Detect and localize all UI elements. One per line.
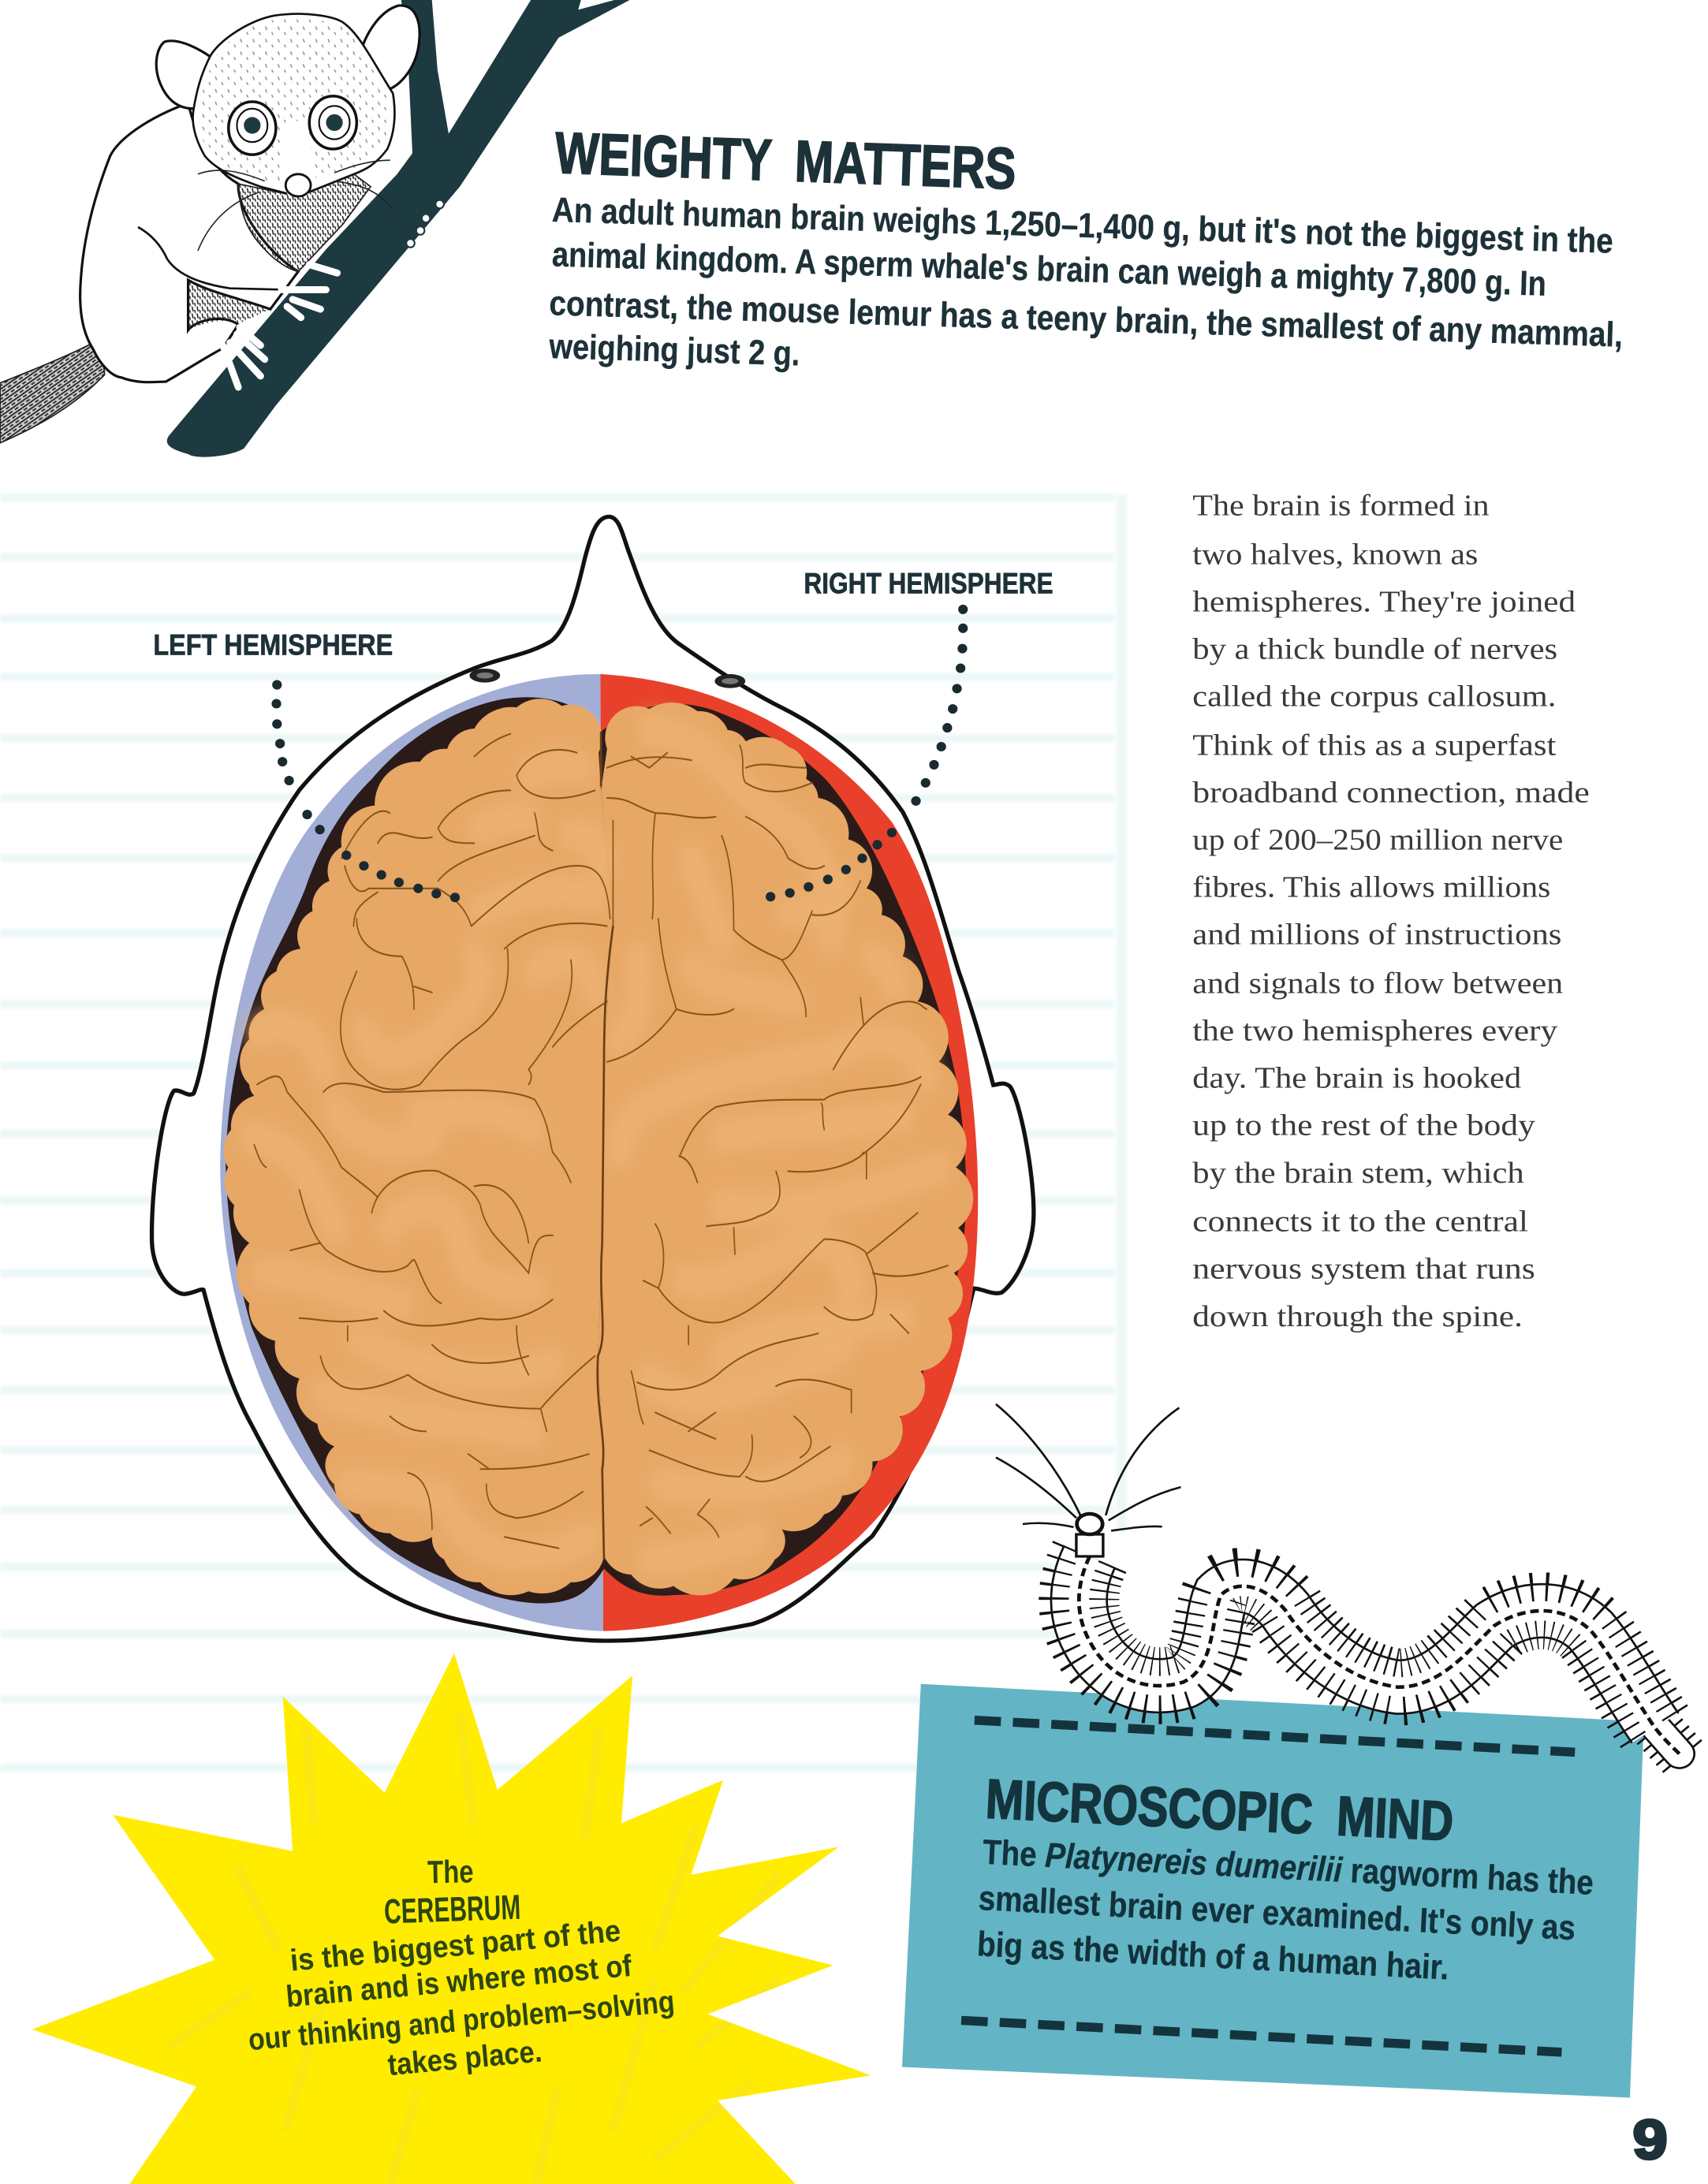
text block: brain description column: day. The brain is hooked — [1192, 1062, 1521, 1095]
snout stripe — [278, 120, 315, 196]
top dashed rule — [975, 1720, 1575, 1752]
illustration: ragworm — [996, 1404, 1684, 1759]
right ear — [360, 6, 420, 92]
illustration: brain — [223, 605, 973, 1604]
body outline — [1079, 1556, 1655, 1728]
text block: weighty matters body: animal kingdom. A sperm whale's brain can weigh a mighty 7,800 g. In — [551, 235, 1547, 304]
right hemisphere colour band — [600, 674, 978, 1631]
text block: brain description column: the two hemispheres every — [1192, 1015, 1557, 1048]
arm line — [138, 227, 285, 289]
tail tip fill — [1650, 1720, 1680, 1754]
starburst text: brain and is where most of — [285, 1949, 634, 2014]
text block: brain description column: down through the spine. — [1192, 1300, 1523, 1333]
body segments — [1079, 1556, 1655, 1728]
gyri highlights — [251, 730, 939, 1560]
tail tip — [1650, 1720, 1680, 1754]
text block: brain description column: and millions of instructions — [1192, 919, 1561, 952]
text block: brain description column: called the corpus callosum. — [1192, 680, 1556, 714]
bottom dashed rule — [961, 2020, 1561, 2052]
nose — [285, 174, 311, 196]
left hemisphere gyri outline — [223, 699, 613, 1595]
midline fissure — [598, 732, 613, 1560]
dotted leader: left hemisphere — [271, 680, 460, 902]
right eye — [309, 96, 356, 149]
callout: yellow starburst on the cerebrum — [32, 1653, 871, 2184]
text block: brain description column: by a thick bundle of nerves — [1192, 633, 1557, 666]
starburst text: CEREBRUM — [383, 1888, 521, 1932]
text block: brain description column: by the brain stem, which — [1192, 1157, 1524, 1190]
bristles — [1079, 1556, 1655, 1728]
dotted leader: right hemisphere — [766, 605, 968, 901]
text block: brain description column: two halves, known as — [1192, 538, 1478, 571]
text block: brain description column: fibres. This allows millions — [1192, 871, 1550, 904]
text block: brain description column: hemispheres. They're joined — [1192, 586, 1576, 619]
lower hand — [223, 327, 265, 387]
heading: weighty matters: WEIGHTY MATTERS — [554, 120, 1017, 201]
tail — [0, 343, 105, 443]
text block: brain description column — [1192, 490, 1590, 1333]
label: right hemisphere: RIGHT HEMISPHERE — [804, 567, 1054, 600]
body — [80, 103, 298, 382]
icon: right eye socket mark — [714, 674, 745, 688]
illustration: head outline seen from above — [152, 516, 1034, 1641]
icon: left eye socket mark — [469, 669, 500, 683]
lower fur patch — [188, 280, 270, 330]
text block: brain description column: and signals to flow between — [1192, 967, 1563, 1001]
neck — [1076, 1534, 1103, 1556]
text block: weighty matters body — [548, 191, 1624, 373]
label: left hemisphere: LEFT HEMISPHERE — [153, 628, 393, 661]
tail bristles — [1650, 1720, 1684, 1759]
head fur — [199, 19, 390, 181]
panel: microscopic mind — [902, 1684, 1644, 2097]
text block: ragworm fact — [976, 1833, 1594, 1988]
teal box — [902, 1684, 1644, 2097]
starburst text: is the biggest part of the — [289, 1914, 622, 1978]
branch spots — [406, 200, 444, 248]
text block: brain description column: Think of this as a superfast — [1192, 729, 1557, 762]
text block: brain description column: broadband connection, made — [1192, 777, 1590, 810]
chest fur — [238, 174, 371, 271]
starburst texture — [167, 1713, 780, 2184]
text block: brain description column: The brain is formed in — [1192, 490, 1490, 523]
left hemisphere colour band — [220, 674, 603, 1631]
text block: ragworm fact: smallest brain ever examined. It's only as — [978, 1879, 1576, 1947]
text block: ragworm fact: The Platynereis dumerilii ragworm has the — [982, 1833, 1594, 1903]
head — [1077, 1514, 1102, 1534]
page number: 9 — [1633, 2108, 1668, 2171]
text block: ragworm fact: big as the width of a human hair. — [976, 1925, 1450, 1988]
branch — [167, 0, 630, 457]
text block: brain description column: connects it to the central — [1192, 1206, 1528, 1239]
right hemisphere gyri outline — [598, 703, 973, 1595]
illustration: mouse lemur on a branch — [0, 0, 630, 457]
right hemisphere sulci — [607, 745, 948, 1537]
head — [193, 14, 394, 196]
body fill — [1079, 1556, 1655, 1728]
inner spine — [1079, 1556, 1655, 1728]
brain dark backing — [226, 697, 966, 1604]
background: ruled lines — [0, 494, 1121, 1768]
heading: microscopic mind: MICROSCOPIC MIND — [984, 1767, 1455, 1852]
starburst text: takes place. — [386, 2035, 543, 2082]
whiskers — [198, 160, 393, 251]
text block: weighty matters body: weighing just 2 g. — [548, 327, 800, 373]
starburst shape — [32, 1653, 871, 2184]
left hemisphere sulci — [254, 734, 610, 1549]
text block: brain description column: up to the rest of the body — [1192, 1109, 1535, 1142]
text block: brain description column: nervous system that runs — [1192, 1253, 1535, 1286]
left ear — [156, 41, 222, 109]
starburst text: our thinking and problem–solving — [247, 1985, 676, 2057]
upper hand — [282, 265, 337, 318]
antennae — [996, 1404, 1180, 1530]
starburst text: The — [427, 1853, 474, 1890]
starburst text — [247, 1853, 676, 2082]
centre dashed line — [1079, 1556, 1680, 1754]
left eye — [229, 102, 276, 155]
text block: brain description column: up of 200–250 million nerve — [1192, 824, 1563, 857]
